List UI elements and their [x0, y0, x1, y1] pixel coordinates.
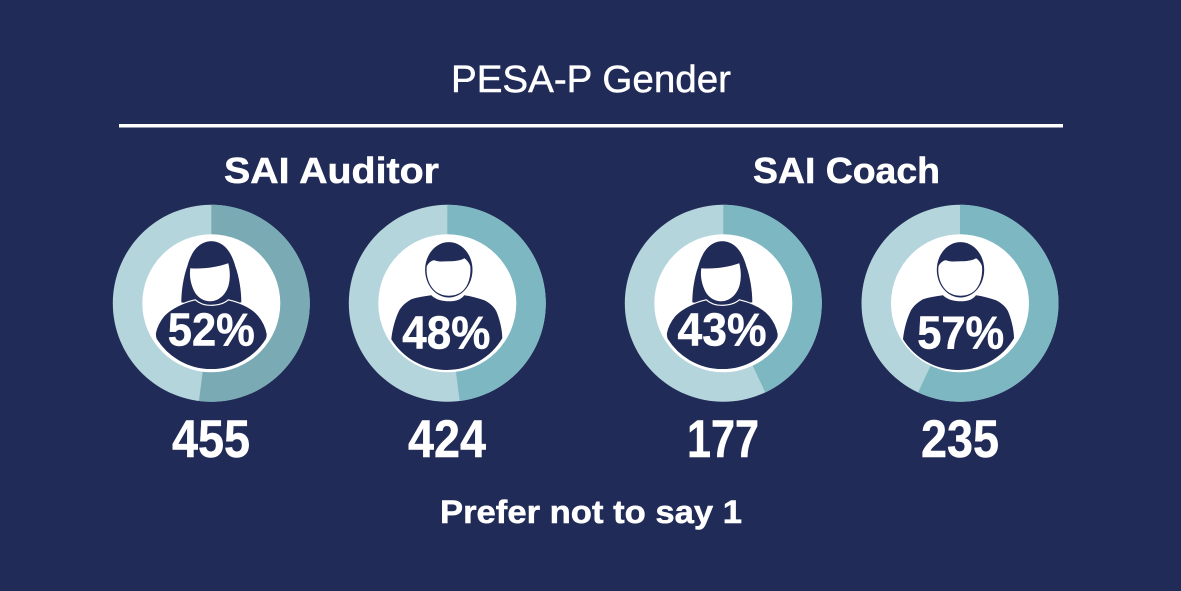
percent label: 48% [402, 306, 490, 358]
icon: man [391, 242, 502, 370]
icon: woman [155, 241, 267, 370]
count: 424: 424 [408, 410, 486, 469]
count: 235: 235 [921, 410, 999, 469]
footnote: Prefer not to say 1 [440, 494, 742, 530]
icon: woman [666, 241, 778, 370]
panel: SAI Coach female donut [625, 205, 822, 402]
panel: SAI Coach male donut [862, 205, 1059, 402]
count: 177: 177 [687, 410, 759, 469]
percent label: 52% [168, 303, 255, 355]
heading: SAI Coach: SAI Coach [753, 150, 940, 191]
title: PESA-P Gender [451, 59, 731, 101]
percent label: 57% [917, 306, 1004, 358]
percent label: 43% [677, 303, 766, 355]
heading: SAI Auditor: SAI Auditor [224, 150, 439, 191]
panel: SAI Auditor female donut [113, 205, 310, 402]
panel: SAI Auditor male donut [349, 205, 546, 402]
count: 455: 455 [172, 410, 250, 469]
icon: man [903, 242, 1014, 370]
